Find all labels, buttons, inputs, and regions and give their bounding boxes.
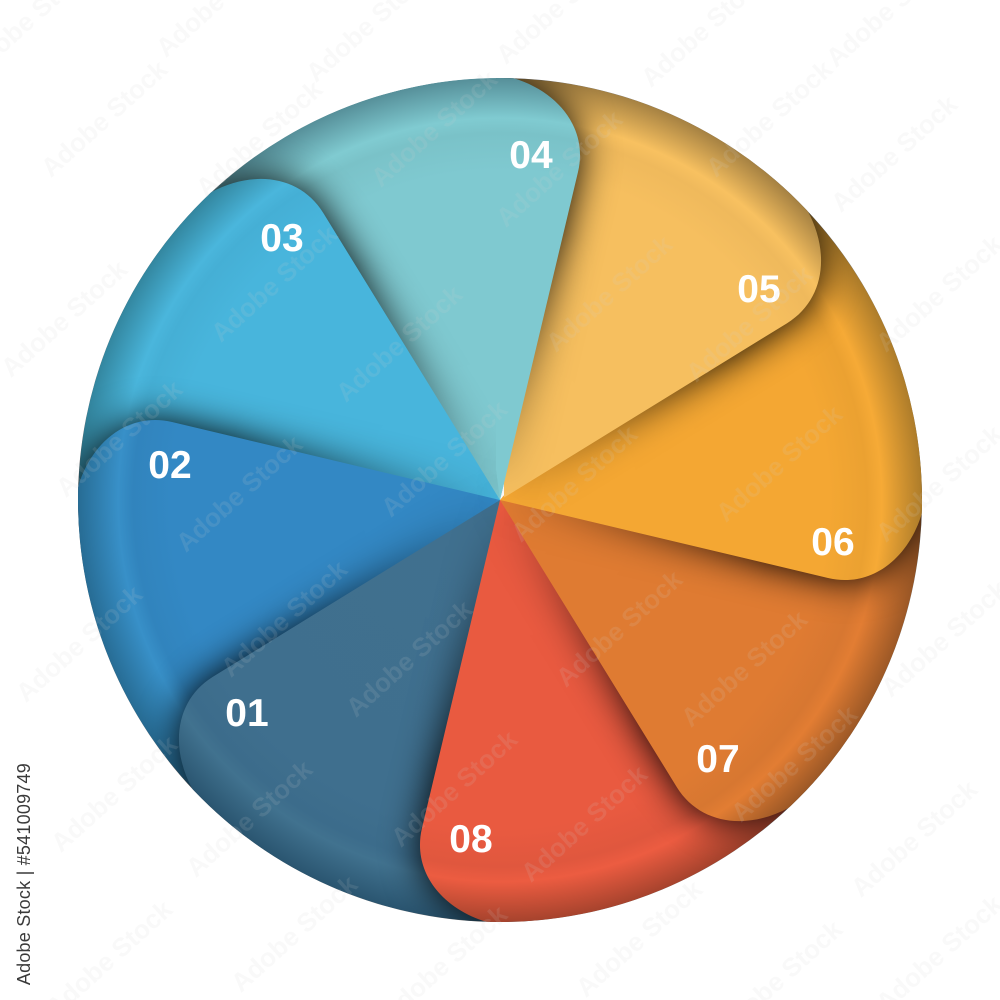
stock watermark pattern: Adobe Stock [35, 54, 173, 183]
petal 03 [78, 150, 500, 544]
stock watermark pattern: Adobe Stock [225, 869, 363, 998]
vertical stock id text: Adobe Stock | #541009749 [14, 763, 34, 985]
label 01: 01 [225, 692, 269, 735]
stock watermark pattern: Adobe Stock [330, 279, 468, 408]
petal 04 underlying part [212, 78, 514, 500]
label 03: 03 [260, 217, 304, 260]
label 07: 07 [696, 738, 740, 781]
stock watermark pattern: Adobe Stock [205, 219, 343, 348]
stock watermark pattern: Adobe Stock [675, 604, 813, 733]
petal 08 [420, 500, 823, 922]
petal 02 [78, 420, 500, 823]
stock watermark pattern: Adobe Stock [725, 699, 863, 828]
label 05: 05 [737, 268, 781, 311]
stock watermark pattern: Adobe Stock [490, 104, 628, 233]
stock watermark pattern: Adobe Stock [50, 374, 188, 503]
pie chart: eight overlapping petals [78, 78, 922, 922]
stock watermark pattern: Adobe Stock [540, 229, 678, 358]
stock watermark pattern: Adobe Stock [215, 554, 353, 683]
petal 04 top edge over petal 05 [496, 78, 610, 500]
stock watermark pattern: Adobe Stock [845, 774, 983, 903]
stock watermark pattern: Adobe Stock [365, 64, 503, 193]
label 06: 06 [811, 521, 855, 564]
stock watermark pattern: Adobe Stock [190, 74, 328, 203]
label 08: 08 [449, 818, 493, 861]
petal 05 [504, 78, 850, 498]
petal 01 [152, 500, 548, 922]
stock watermark pattern: Adobe Stock [505, 419, 643, 548]
stock watermark pattern: Adobe Stock [180, 754, 318, 883]
stock watermark pattern: Adobe Stock [340, 594, 478, 723]
stock watermark pattern: Adobe Stock [550, 564, 688, 693]
stock watermark pattern: Adobe Stock [375, 394, 513, 523]
stock watermark pattern: Adobe Stock [45, 729, 183, 858]
label 02: 02 [148, 444, 192, 487]
petal 07 [500, 452, 922, 850]
number labels [148, 134, 855, 861]
label 04: 04 [509, 134, 553, 177]
stock watermark pattern: Adobe Stock [515, 759, 653, 888]
stock watermark pattern: Adobe Stock [385, 724, 523, 853]
stock watermark pattern: Adobe Stock [700, 54, 838, 183]
stock watermark pattern: Adobe Stock [710, 399, 848, 528]
stock watermark pattern: Adobe Stock [570, 874, 708, 1000]
stock watermark pattern: Adobe Stock [170, 429, 308, 558]
stock watermark pattern: Adobe Stock [825, 89, 963, 218]
stock watermark pattern: Adobe Stock [680, 259, 818, 388]
stock watermark pattern: Adobe Stock [10, 579, 148, 708]
petal 06 [500, 177, 922, 580]
